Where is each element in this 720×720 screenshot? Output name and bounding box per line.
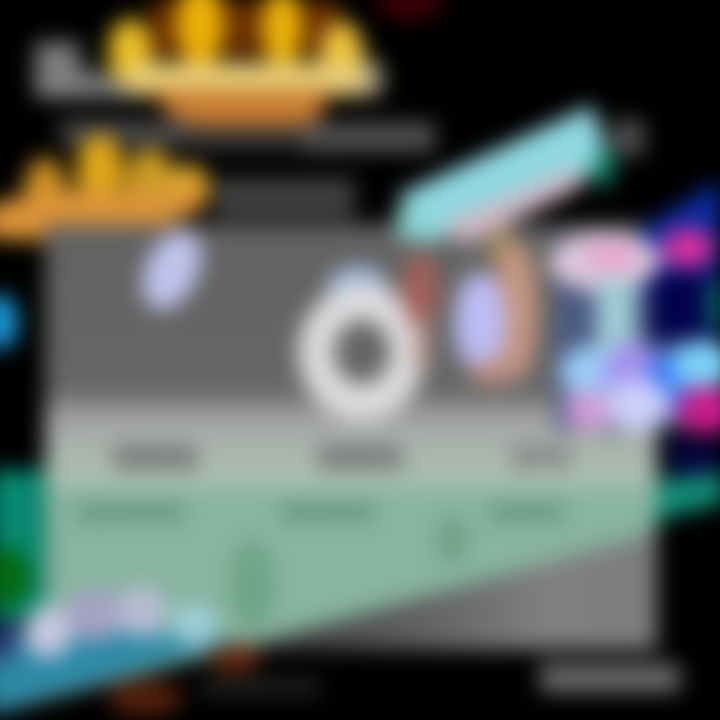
bottom-left blue band	[0, 625, 235, 715]
panel: main grey card	[45, 224, 657, 520]
stat values	[110, 440, 573, 478]
title: Gu	[80, 61, 120, 102]
source label: Source	[540, 662, 680, 700]
stat values: 3%	[508, 440, 573, 478]
icon: top crown decoration	[108, 0, 365, 128]
subtitle: Subtitle	[200, 124, 290, 154]
stat values: 50%	[110, 440, 200, 478]
icon: lavender leaf	[131, 221, 213, 319]
icon: figure beside ring	[402, 228, 538, 384]
stat values: 50%	[315, 440, 405, 478]
rust accents	[107, 643, 261, 716]
footer text: Footer	[200, 676, 321, 701]
icon: left crown decoration	[0, 134, 210, 245]
panel: grey lower-right wedge	[220, 500, 657, 650]
icon: blue dot	[0, 294, 18, 350]
panel: green lower band	[0, 490, 657, 712]
stat labels: Label	[280, 502, 375, 527]
green shading	[228, 516, 470, 631]
background glow	[376, 0, 444, 20]
footer text	[200, 676, 321, 701]
icon: ring chart	[316, 266, 408, 402]
icon: lavender clusters	[0, 586, 217, 662]
title	[35, 42, 382, 102]
stat labels: Label	[75, 502, 185, 527]
right teal strip	[657, 472, 720, 520]
left teal strip	[0, 470, 44, 620]
panel: right colour collage	[549, 180, 720, 475]
secondary subtitle: Overview	[220, 184, 347, 217]
stat labels	[75, 502, 565, 527]
subtitle	[60, 120, 644, 156]
stat labels: Label	[490, 502, 565, 527]
icon: tilted ribbon	[396, 105, 614, 245]
